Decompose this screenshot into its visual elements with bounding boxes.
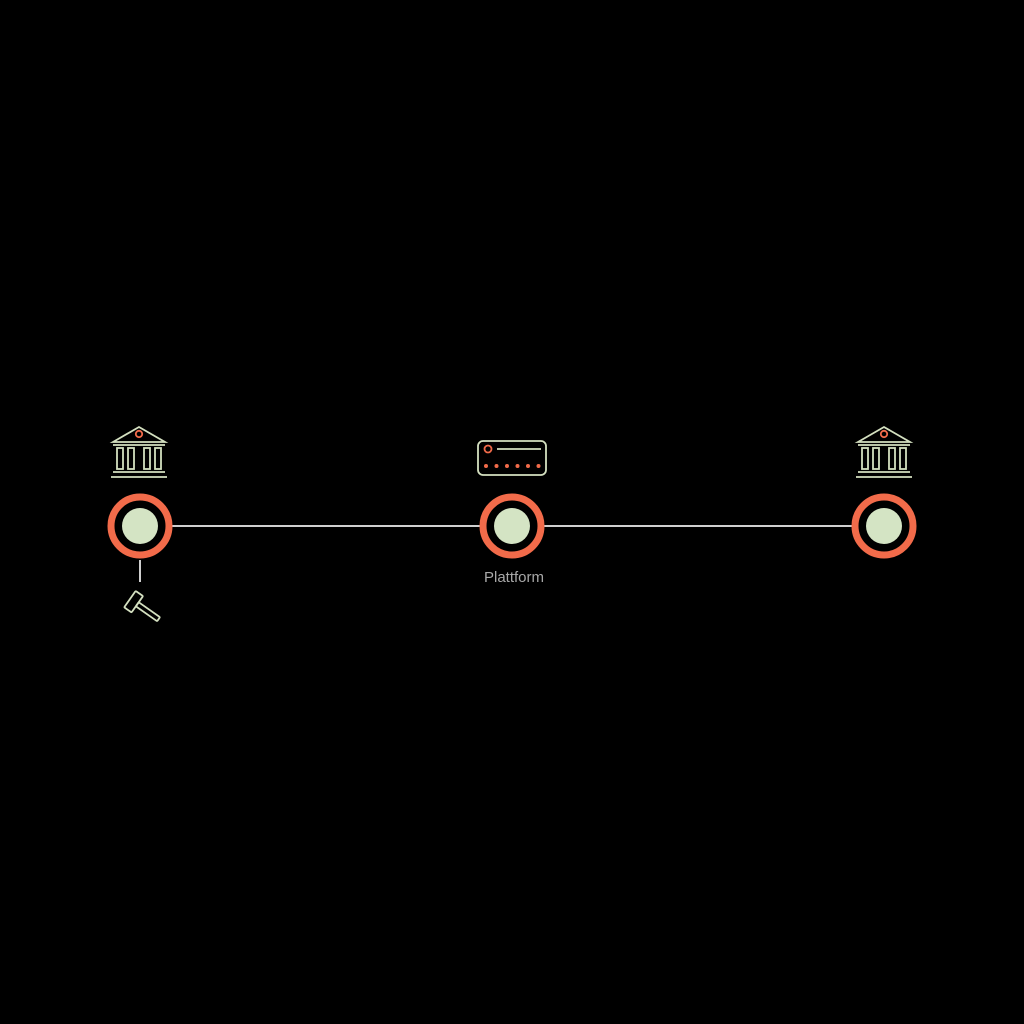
node right (855, 497, 913, 555)
node left (111, 497, 169, 555)
label: Plattform: Plattform (484, 569, 544, 586)
connector line (172, 525, 852, 527)
icon: platform card (478, 441, 546, 475)
stem to gavel (139, 560, 141, 582)
icon: bank right (856, 427, 912, 477)
icon: gavel (124, 591, 164, 627)
icon: bank left (111, 427, 167, 477)
node middle (483, 497, 541, 555)
